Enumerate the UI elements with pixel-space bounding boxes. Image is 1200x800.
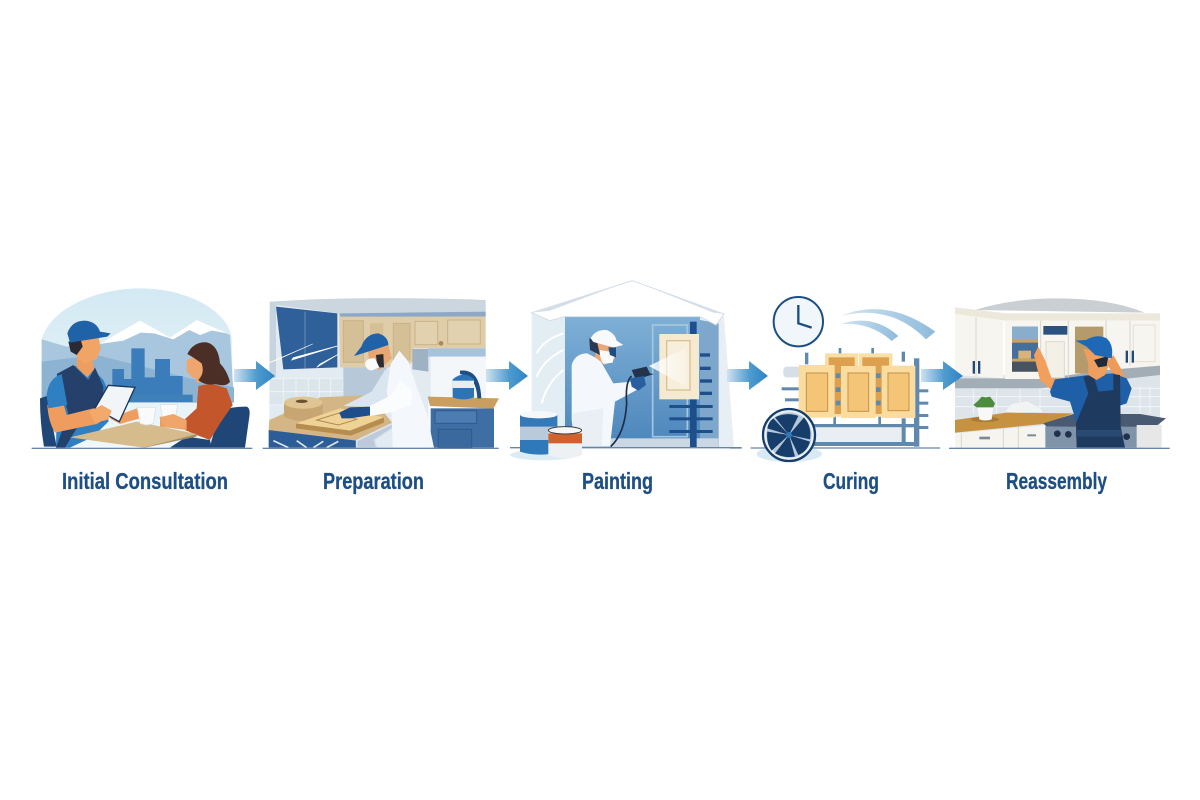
arrow 4 <box>921 361 963 390</box>
panel: preparation <box>263 298 499 449</box>
heading: Painting: Painting <box>582 468 653 494</box>
clipboard <box>95 385 135 422</box>
booth interior <box>563 316 702 448</box>
lower cabinets <box>955 425 1045 448</box>
baseline <box>263 448 499 449</box>
coffee cups <box>137 405 187 428</box>
booth back door frame <box>653 325 687 437</box>
consultant chair <box>40 396 57 447</box>
panel: reassembly <box>949 298 1170 449</box>
cabinet door on bench <box>296 408 384 436</box>
baseline <box>32 448 252 449</box>
worktop <box>269 395 393 448</box>
front cabinet doors <box>799 365 915 418</box>
city skyline <box>110 348 193 402</box>
tent roof <box>532 281 724 325</box>
worktop and plant <box>955 397 1073 433</box>
paint can <box>453 370 481 399</box>
arrow 3 <box>727 361 768 390</box>
airflow swooshes <box>840 309 935 341</box>
wall and backsplash <box>955 365 1160 433</box>
paint spray <box>649 347 687 387</box>
painter <box>572 330 637 447</box>
baseline <box>510 446 742 450</box>
fan icon <box>763 409 815 461</box>
paint cans <box>510 411 582 460</box>
open cabinet left <box>1012 327 1038 372</box>
mountains <box>42 320 234 403</box>
drying rack <box>669 322 713 448</box>
range hood <box>412 349 428 372</box>
right counter and lower cabinet <box>428 397 499 448</box>
crown moulding <box>955 307 1160 321</box>
back cabinet doors <box>825 353 892 417</box>
panel: curing <box>730 297 940 462</box>
clock icon <box>774 297 823 346</box>
technician <box>1034 336 1132 448</box>
arrow 2 <box>486 361 528 390</box>
ceiling trim <box>339 312 486 317</box>
spray gun and hose <box>611 367 654 447</box>
backsplash <box>269 367 387 405</box>
upper cabinets <box>955 314 1160 379</box>
client <box>160 342 233 448</box>
booth floor <box>610 438 718 448</box>
window <box>269 302 339 378</box>
room wall <box>269 302 486 448</box>
table <box>70 422 197 448</box>
stove <box>1043 414 1166 448</box>
sky dome <box>42 288 234 447</box>
panel: initial consultation <box>32 288 252 449</box>
panel: painting <box>510 281 742 460</box>
consultant hand <box>89 405 112 423</box>
ceiling <box>270 298 486 313</box>
consultant <box>47 321 140 448</box>
baseline <box>949 448 1170 449</box>
fridge <box>428 348 486 398</box>
heading: Preparation: Preparation <box>323 468 424 494</box>
heading: Initial Consultation: Initial Consultation <box>62 468 228 494</box>
drying rack <box>782 348 928 447</box>
booth tent sides <box>532 313 734 448</box>
arrow 1 <box>234 361 275 390</box>
fan shadow <box>757 446 822 462</box>
client chair <box>210 407 250 448</box>
open cabinet right <box>1075 327 1103 373</box>
baseline <box>730 446 940 450</box>
heading: Curing: Curing <box>823 468 879 494</box>
tape roll <box>284 397 323 421</box>
roof shade <box>532 281 724 314</box>
ceiling dome <box>975 298 1145 313</box>
cabinet door <box>659 334 699 399</box>
upper cabinets <box>339 317 486 367</box>
heading: Reassembly: Reassembly <box>1006 468 1107 494</box>
worker in coveralls <box>339 333 434 448</box>
